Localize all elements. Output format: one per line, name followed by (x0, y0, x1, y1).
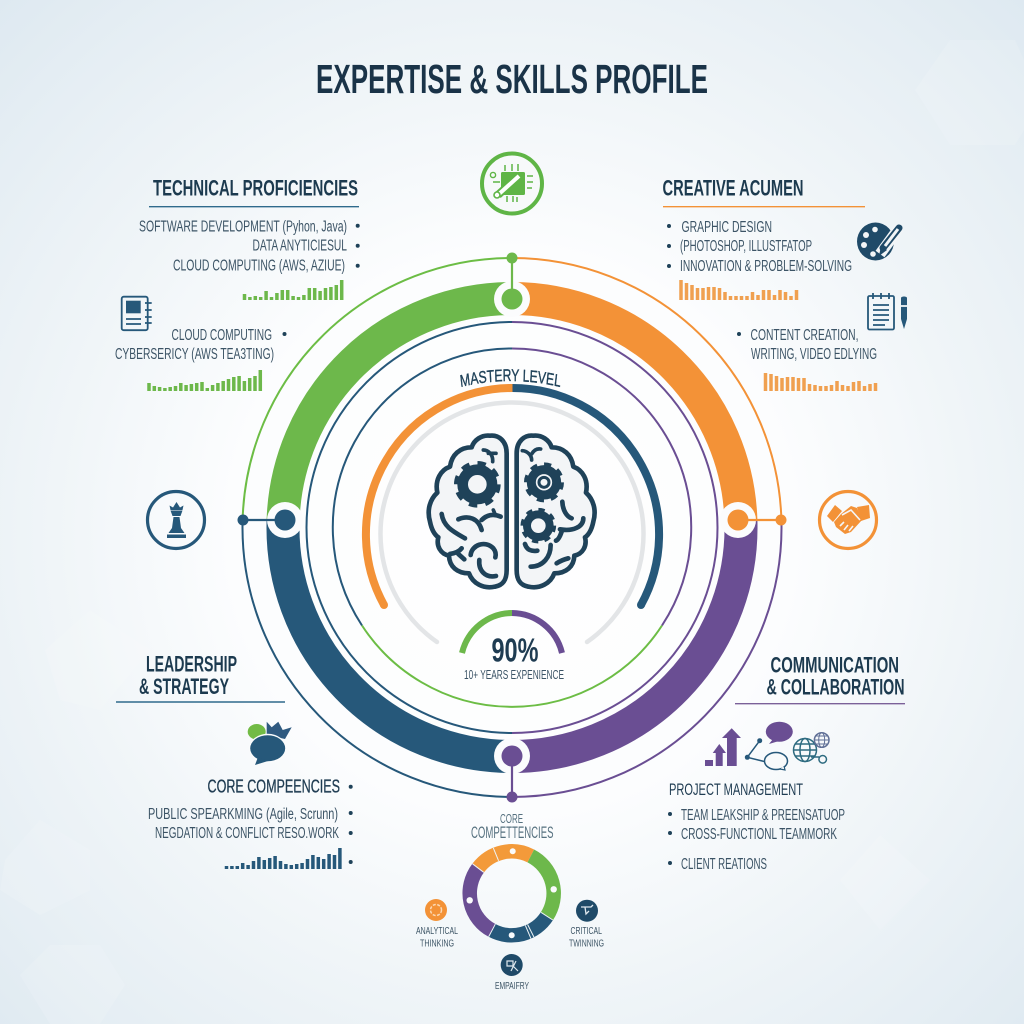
bar chart (766, 373, 876, 391)
percentage: 90% (492, 632, 538, 668)
experience caption: 10+ YEARS EXPENIENCE (464, 667, 564, 682)
heading: CREATIVE ACUMEN (662, 176, 804, 200)
heading: CORE (500, 811, 523, 826)
secondary skill list (737, 327, 877, 363)
heading (139, 652, 237, 699)
skill list: SOFTWARE DEVELOPMENT (Pyhon, Java) (139, 218, 347, 236)
skill list: CORE COMPEENCIES (208, 777, 340, 797)
panel: leadership and strategy (116, 652, 353, 869)
mastery gauge (362, 369, 664, 644)
label: empathy: EMPAIFRY (495, 980, 529, 992)
bar chart (226, 848, 340, 869)
bar chart (681, 280, 796, 300)
panel: communication and collaboration (668, 653, 905, 873)
heading: TECHNICAL PROFICIENCIES (153, 176, 358, 200)
icon: brain with gears (429, 436, 595, 587)
heading: & COLLABORATION (766, 674, 904, 700)
panel: creative acumen (662, 176, 907, 391)
skill list: PUBLIC SPEARKMING (Agile, Scrunn) (148, 806, 338, 823)
donut chart (466, 848, 557, 938)
icon: chess piece (148, 492, 204, 548)
heading (766, 653, 904, 700)
skill list: CLOUD COMPUTING (AWS, AZIUE) (173, 258, 345, 275)
skill list: TEAM LEAKSHIP & PREENSATUOP (681, 807, 845, 824)
icon: globes (794, 733, 829, 763)
icon: chip and wrench (482, 154, 542, 214)
skill list: CLIENT REATIONS (681, 856, 767, 873)
skill list: NEGDATION & CONFLICT RESO.WORK (155, 825, 339, 842)
label: critical thinking: TWINNING (569, 938, 604, 950)
title: EXPERTISE & SKILLS PROFILE (316, 56, 708, 102)
thick segmented ring (283, 298, 741, 756)
middle thin rings (306, 322, 718, 733)
label: analytical thinking: ANALYTICAL (416, 925, 458, 937)
outer thin ring (242, 258, 782, 797)
heading: & STRATEGY (139, 674, 229, 699)
icon: palette and pencil (857, 222, 899, 260)
heading: LEADERSHIP (146, 652, 237, 677)
skill list (139, 218, 360, 275)
icon: critical thinking (576, 900, 598, 922)
heading: COMPETTENCIES (471, 824, 554, 842)
panel: core competencies (416, 811, 604, 992)
label: analytical thinking: THINKING (420, 938, 454, 950)
skill list: CROSS-FUNCTIONL TEAMMORK (681, 826, 837, 843)
secondary skill list: WRITING, VIDEO EDLYING (751, 346, 877, 363)
icon: growth arrows (705, 728, 741, 766)
experience gauge (462, 613, 564, 682)
label: critical thinking: CRITICAL (570, 925, 602, 937)
skill list (668, 780, 845, 873)
skill list: PROJECT MANAGEMENT (669, 780, 803, 799)
icon: notebook (122, 297, 152, 330)
heading: COMMUNICATION (770, 653, 899, 678)
skill list: DATA ANYTICIESUL (252, 238, 347, 255)
bar chart (149, 370, 260, 391)
icon: empathy (501, 954, 523, 976)
icon: crown and speech bubble (248, 722, 292, 765)
icon: notepad and pen (868, 293, 907, 330)
secondary skill list: CONTENT CREATION, (750, 327, 858, 344)
secondary skill list (115, 327, 286, 363)
skill list (667, 219, 852, 275)
junction nodes (238, 252, 786, 802)
mastery level label: MASTERY LEVEL (460, 369, 560, 388)
bar chart (244, 280, 342, 300)
secondary skill list: CYBERSERICY (AWS TEA3TING) (115, 346, 274, 363)
secondary skill list: CLOUD COMPUTING (172, 327, 272, 344)
skill list (148, 777, 353, 864)
heading (471, 811, 554, 842)
label: analytical thinking (416, 925, 458, 950)
skill list: GRAPHIC DESIGN (682, 219, 772, 236)
icon: handshake (820, 492, 876, 548)
skill list: INNOVATION & PROBLEM-SOLVING (680, 258, 852, 275)
skill list: (PHOTOSHOP, ILLUSTFATOP (680, 238, 812, 255)
icon: analytical thinking (425, 899, 447, 921)
label: critical thinking (569, 925, 604, 950)
central ring diagram (238, 252, 786, 802)
icon: network and speech bubbles (745, 722, 793, 770)
panel: technical proficiencies (115, 176, 360, 391)
